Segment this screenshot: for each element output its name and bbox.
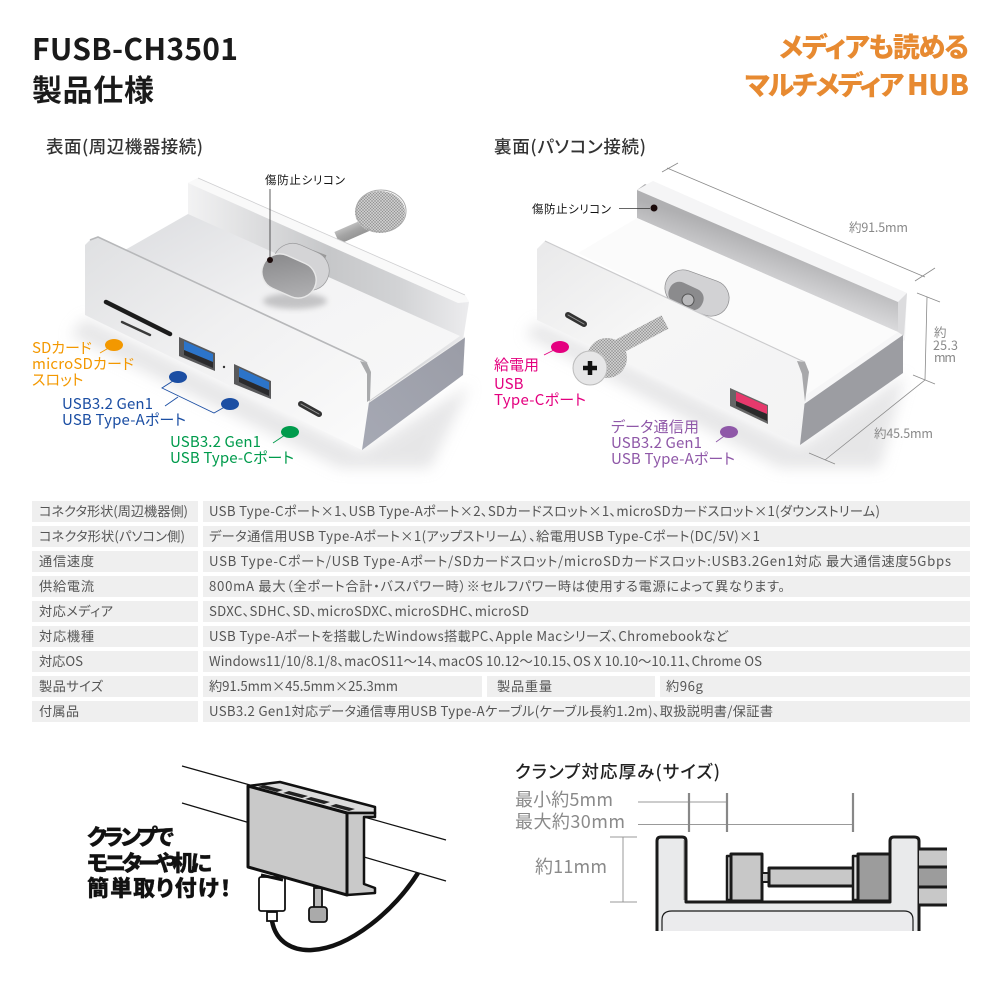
- callout: USB-C power port: Type-Cポート: [494, 389, 586, 410]
- row: supported OS: Windows11/10/8.1/8、macOS11～14、macOS 10.12～10.15、OS X 10.10～10.11、Chrome OS: [209, 651, 762, 670]
- row: transfer speed: 通信速度: [39, 551, 94, 570]
- row: connector peripheral side: [32, 501, 970, 522]
- clamp thickness labels: 最小約5mm: [515, 786, 613, 812]
- row: connector peripheral side: コネクタ形状(周辺機器側): [39, 501, 188, 520]
- row: supported models: [32, 626, 970, 647]
- row: supply current: [32, 576, 970, 597]
- clamp caption: クランプで: [87, 820, 174, 852]
- tagline: media-reading multimedia hub: [745, 26, 969, 104]
- heading: front side: 表面(周辺機器接続): [46, 134, 203, 159]
- adjuster left block: [727, 856, 733, 900]
- callout: USB Type-A ports: USB3.2 Gen1: [62, 393, 153, 414]
- row: supported models: USB Type-Aポートを搭載したWindows搭載PC、Apple Macシリーズ、Chromebookなど: [209, 626, 729, 645]
- dimensions: 約: [934, 322, 947, 341]
- monitor edge lines: [182, 766, 446, 881]
- rear plate: [637, 181, 907, 407]
- grey side panel: [362, 337, 465, 450]
- clamp top pill: [660, 265, 734, 321]
- row: size and weight: [32, 676, 970, 697]
- row: connector PC side: コネクタ形状(パソコン側): [39, 526, 185, 545]
- callout: USB-C power port: 給電用: [494, 354, 539, 375]
- dimensions: 25.3: [933, 335, 958, 354]
- USB-A ports: [179, 337, 271, 399]
- heading: back side: 裏面(パソコン接続): [494, 134, 646, 159]
- USB plug: [259, 875, 285, 921]
- row: supported media: SDXC、SDHC、SD、microSDXC、microSDHC、microSD: [209, 601, 529, 620]
- row: supply current: 供給電流: [39, 576, 94, 595]
- clamp caption: モニターや机に: [87, 846, 212, 878]
- cable: [272, 873, 418, 950]
- row: accessories: USB3.2 Gen1対応データ通信専用USB Type-Aケーブル(ケーブル長約1.2m)、取扱説明書/保証書: [209, 701, 773, 720]
- row: connector PC side: [32, 526, 970, 547]
- USB-A data port: [730, 388, 768, 424]
- SD card slots: [106, 302, 170, 335]
- base floor: [125, 214, 460, 400]
- title: model and spec heading: 製品仕様: [32, 66, 154, 110]
- heading: clamp thickness: クランプ対応厚み(サイズ): [515, 759, 720, 784]
- USB-C port: [301, 404, 319, 414]
- front plate: [85, 237, 370, 450]
- row: transfer speed: USB Type-Cポート/USB Type-Aポート/SDカードスロット/microSDカードスロット:USB3.2Gen1対応 最大通信速度5Gbps: [209, 551, 951, 570]
- clamp cross-section diagram: [657, 837, 947, 931]
- threaded shaft: [769, 868, 854, 886]
- callout: USB Type-C port: USB3.2 Gen1: [170, 431, 261, 452]
- clamp caption: 簡単取り付け！: [87, 871, 231, 903]
- row: accessories: 付属品: [39, 701, 79, 720]
- title: model and spec heading: [32, 25, 238, 110]
- callout: USB-A data port: データ通信用: [611, 416, 699, 437]
- callout: USB-A data port: USB Type-Aポート: [611, 448, 735, 469]
- callout: SD card slot: スロット: [32, 369, 83, 390]
- callout: silicone, front: 傷防止シリコン: [265, 172, 345, 188]
- clamp mounting illustration: [182, 766, 446, 950]
- dimensions: [662, 163, 958, 464]
- clamp caption: [87, 820, 231, 903]
- row: connector PC side: データ通信用USB Type-Aポート×1(アップストリーム）、給電用USB Type-Cポート(DC/5V)×1: [209, 526, 760, 545]
- clamp thickness labels: 約11mm: [535, 853, 607, 879]
- product photo: front view of hub: [70, 178, 470, 468]
- tagline: media-reading multimedia hub: マルチメディア: [745, 64, 905, 103]
- base floor: [578, 218, 898, 395]
- callout: USB Type-C port: USB Type-Cポート: [170, 447, 294, 468]
- callout: USB Type-C port: [170, 426, 299, 468]
- knob and threaded rod: [573, 322, 665, 385]
- row: supported OS: 対応OS: [39, 651, 83, 670]
- dimensions: 約91.5mm: [849, 217, 908, 236]
- dimensions: mm: [934, 347, 956, 366]
- tagline: media-reading multimedia hub: HUB: [907, 64, 969, 104]
- row: size and weight: 製品重量: [497, 676, 552, 695]
- tagline: media-reading multimedia hub: メディアも読める: [779, 26, 969, 65]
- row: size and weight: 約91.5mm×45.5mm×25.3mm: [209, 676, 398, 695]
- clamp thickness labels: 最大約30mm: [515, 808, 625, 834]
- callout: USB Type-A ports: [62, 371, 239, 430]
- knob and threaded rod: [337, 190, 406, 238]
- row: supply current: 800mA 最大（全ポート合計・バスパワー時）※セルフパワー時は使用する電源によって異なります。: [209, 576, 785, 595]
- clamp thickness labels: [515, 786, 625, 879]
- front plate: [537, 241, 808, 445]
- grey side panel: [800, 335, 903, 445]
- row: supported OS: [32, 651, 970, 672]
- row: supported media: [32, 601, 970, 622]
- callout: SD card slot: [32, 337, 134, 390]
- product photo: back view of hub: [525, 181, 907, 468]
- row: supported media: 対応メディア: [39, 601, 113, 620]
- dimensions: 約45.5mm: [874, 423, 933, 442]
- clamp foot pad: [256, 237, 336, 309]
- callout: USB-A data port: [611, 416, 738, 469]
- callout: SD card slot: SDカード: [32, 337, 92, 358]
- row: connector peripheral side: USB Type-Cポート×1、USB Type-Aポート×2、SDカードスロット×1、microSDカードスロット×1(ダウンストリーム): [209, 501, 880, 520]
- callout: USB-A data port: USB3.2 Gen1: [611, 432, 702, 453]
- callout: silicone, back: [532, 201, 658, 217]
- clamp screw: [309, 888, 327, 922]
- callout: USB Type-A ports: USB Type-Aポート: [62, 409, 186, 430]
- row: size and weight: 製品サイズ: [39, 676, 103, 695]
- callout: USB-C power port: [494, 341, 586, 410]
- callout: SD card slot: microSDカード: [32, 353, 134, 374]
- clamp thickness dimension lines: [610, 793, 853, 902]
- row: supported models: 対応機種: [39, 626, 94, 645]
- USB-C power port: [568, 315, 584, 324]
- title: model and spec heading: FUSB-CH3501: [32, 25, 238, 69]
- rear clamp plate: [188, 178, 469, 407]
- callout: silicone, front: [265, 172, 345, 263]
- adjuster right block: [853, 856, 859, 900]
- callout: USB-C power port: USB: [494, 373, 524, 394]
- callout: silicone, back: 傷防止シリコン: [532, 201, 611, 217]
- row: size and weight: 約96g: [666, 676, 704, 695]
- hub body: [248, 782, 375, 895]
- knob rods: [919, 849, 947, 905]
- spec table: [32, 501, 970, 722]
- row: accessories: [32, 701, 970, 722]
